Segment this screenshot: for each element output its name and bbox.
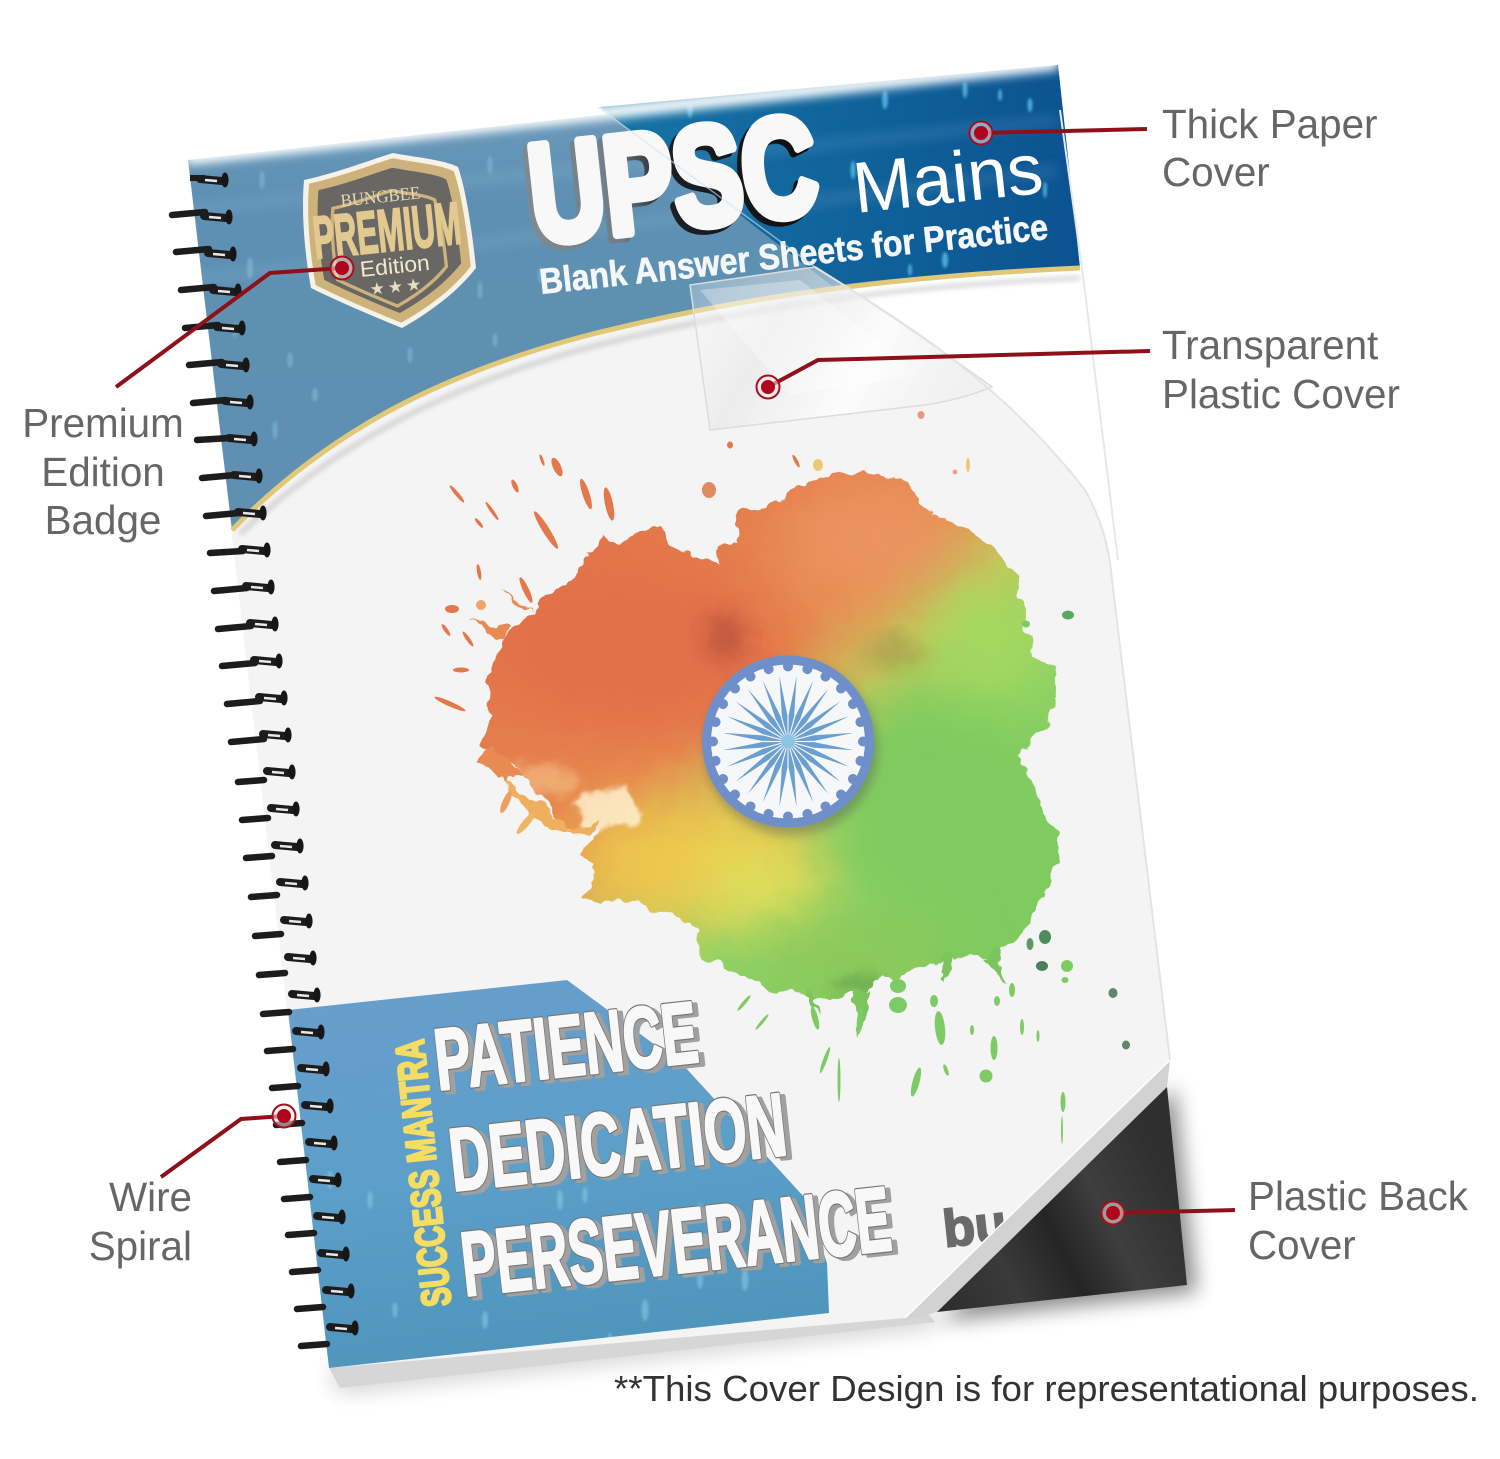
- chakra shadow: [704, 662, 878, 836]
- word dedication: DEDICATION: [450, 1076, 796, 1212]
- orange droplets: [433, 411, 924, 836]
- word dedication: DEDICATION: [444, 1074, 791, 1210]
- word perseverance: PERSEVERANCE: [456, 1169, 896, 1316]
- yellow droplets: [813, 458, 970, 474]
- leader line: [116, 268, 342, 387]
- white sheet: [188, 65, 1186, 1368]
- wire spiral: [172, 172, 359, 1346]
- glow along top edge: [186, 63, 1058, 158]
- fringe of the splash: [470, 590, 1005, 1040]
- badge edition: Edition: [359, 250, 431, 282]
- yellow mantra text: SUCCESS MANTRA: [387, 1037, 460, 1309]
- back cover shadow: [940, 1087, 1197, 1322]
- chakra hub: [781, 734, 795, 748]
- label: Cover: [1248, 1222, 1356, 1268]
- label: Edition: [41, 449, 165, 495]
- book shadow: [325, 1305, 940, 1394]
- band uncovered dark blue: [600, 65, 1080, 286]
- flap highlight: [700, 280, 920, 395]
- badge grey core: [318, 168, 461, 313]
- badge brand: BUNGBEE: [340, 182, 421, 211]
- marker: [1102, 1202, 1124, 1224]
- lower blue shape: [288, 980, 829, 1368]
- badge gold lining: [332, 191, 446, 306]
- leader line: [1113, 1210, 1235, 1213]
- plastic back cover: [905, 1060, 1197, 1322]
- gold swoosh: [232, 268, 1080, 530]
- chakra rim: [702, 656, 874, 828]
- swoosh shadow: [240, 278, 1080, 534]
- word dedication: [444, 1073, 796, 1213]
- title UPSC Mains: [517, 86, 1050, 302]
- callout: premium edition badge: [22, 256, 354, 543]
- word perseverance: PERSEVERANCE: [456, 1169, 896, 1316]
- subtitle: Blank Answer Sheets for Practice: [537, 206, 1050, 302]
- peeled plastic sheet: [598, 107, 1170, 1060]
- paper right edge: [1060, 110, 1118, 560]
- top cover band: [186, 63, 1080, 534]
- back cover: [937, 1087, 1187, 1312]
- premium edition badge: [303, 153, 476, 328]
- footnote: **This Cover Design is for representational purposes.: [614, 1368, 1479, 1409]
- badge gold: [308, 158, 471, 323]
- plastic fold over blue: [598, 107, 815, 267]
- UPSC: UPSC: [521, 86, 825, 273]
- label: Badge: [45, 497, 161, 543]
- leader line: [768, 351, 1150, 387]
- label: Thick Paper: [1162, 101, 1378, 147]
- word patience: PATIENCE: [430, 984, 703, 1109]
- green droplets: [736, 610, 1130, 1144]
- brand fragment: bu: [940, 1194, 1009, 1259]
- label: Plastic Cover: [1162, 371, 1400, 417]
- label: Wire: [109, 1174, 192, 1220]
- word perseverance: [456, 1168, 901, 1319]
- label: Plastic Back: [1248, 1173, 1469, 1219]
- callout: transparent plastic cover: [756, 322, 1400, 417]
- badge stars: ★★★: [369, 275, 425, 300]
- callout: thick paper cover: [970, 101, 1378, 195]
- marker: [756, 376, 780, 398]
- label: Cover: [1162, 149, 1270, 195]
- Mains: Mains: [849, 129, 1047, 229]
- leader line: [161, 1116, 284, 1177]
- plastic corner highlight: [905, 1060, 1170, 1318]
- wire loops: [190, 172, 359, 1336]
- callout: plastic back cover: [1102, 1173, 1469, 1268]
- label: Premium: [22, 400, 184, 446]
- sparkles: [188, 82, 1058, 439]
- badge premium: PREMIUM: [310, 190, 464, 272]
- chakra spokes: [722, 676, 854, 807]
- curled flap: [690, 267, 992, 430]
- notebook paper: [188, 65, 1186, 1388]
- callout: wire spiral: [89, 1104, 296, 1269]
- splash body: [460, 460, 1080, 1040]
- label: Transparent: [1162, 322, 1378, 368]
- plastic curled edge: [815, 267, 1170, 1060]
- ashoka chakra: [702, 656, 878, 836]
- success mantra panel: [288, 980, 1009, 1368]
- badge outline: [303, 153, 476, 328]
- label: Spiral: [89, 1223, 192, 1269]
- plastic tinted area: [188, 160, 1170, 1368]
- word perseverance: PERSEVERANCE: [462, 1171, 901, 1318]
- lower sparkles: [327, 1171, 748, 1347]
- page stack: [329, 1305, 935, 1388]
- band plastic-covered blue: [188, 65, 1080, 530]
- word patience: PATIENCE: [430, 984, 703, 1109]
- plastic corner strip: [905, 1060, 1170, 1320]
- word patience: PATIENCE: [435, 986, 708, 1111]
- marker: [272, 1104, 296, 1128]
- word dedication: DEDICATION: [444, 1074, 791, 1210]
- back wires: [172, 212, 327, 1346]
- leader line: [981, 129, 1147, 133]
- UPSC shadow: UPSC: [517, 90, 820, 277]
- chakra bumps: [708, 662, 868, 822]
- word patience: [430, 983, 708, 1112]
- tricolor paint splash: [433, 411, 1130, 1144]
- marker: [970, 122, 992, 144]
- marker: [330, 256, 354, 280]
